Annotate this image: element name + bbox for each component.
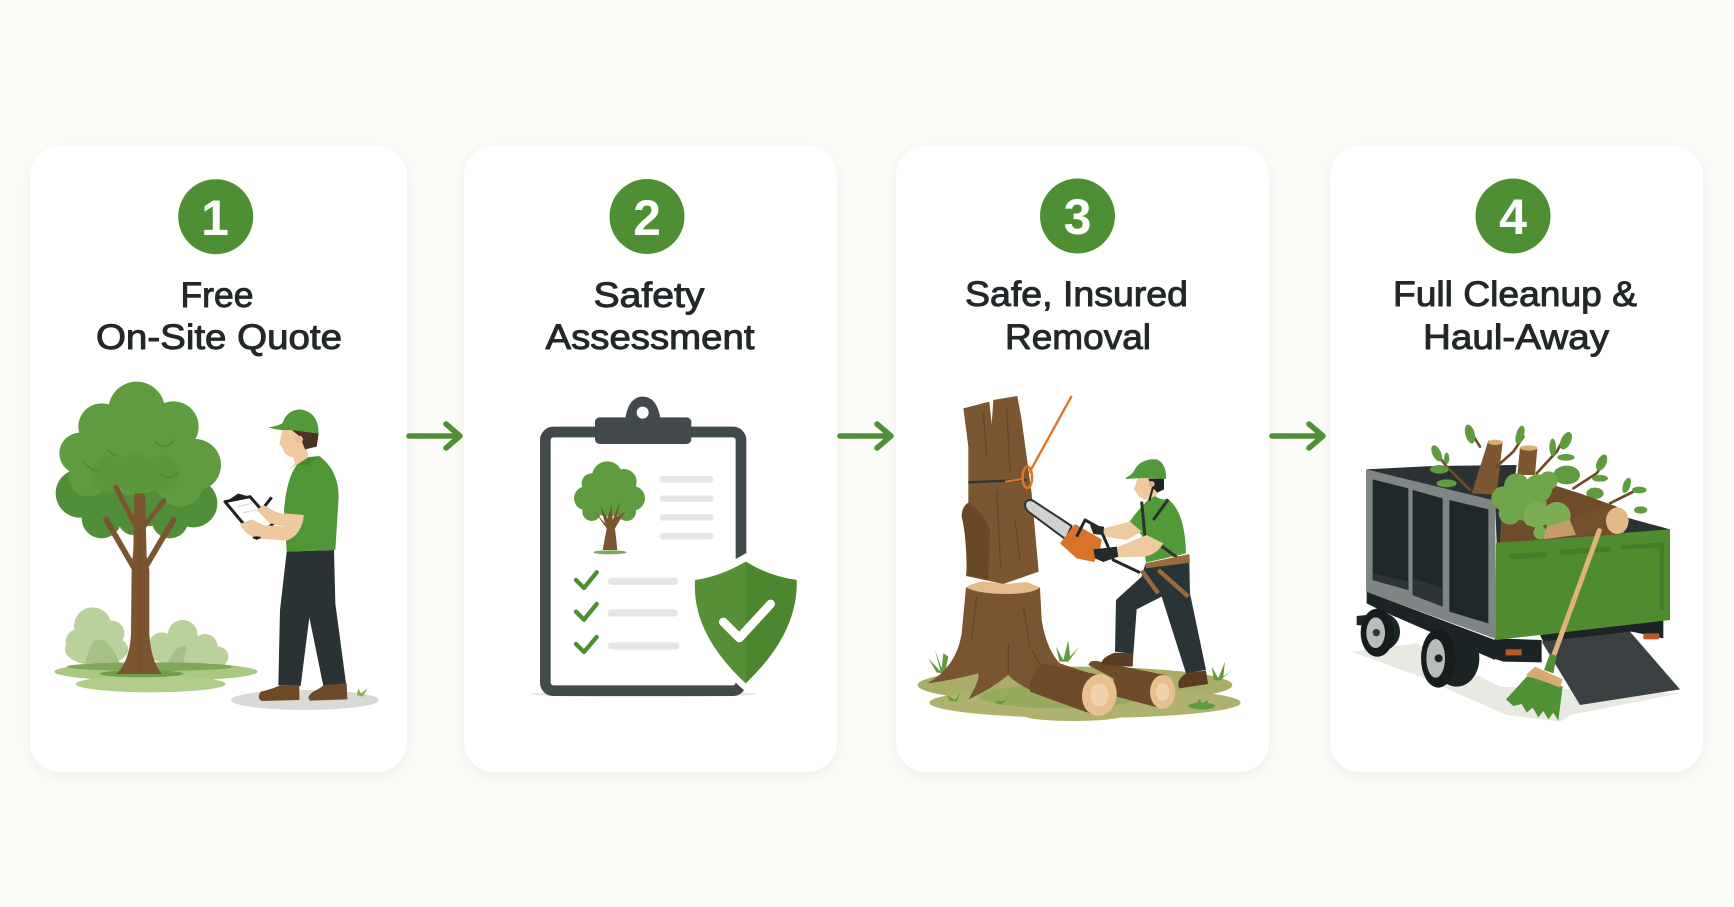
heading: Full Cleanup and Haul-Away [1393, 275, 1637, 357]
step number badge 4 [1476, 178, 1550, 254]
icon: stump and cut trunk [927, 396, 1100, 699]
step number badge 2: 2 [633, 190, 661, 246]
step number badge 2 [610, 179, 684, 254]
heading: Safe, Insured Removal [965, 275, 1188, 357]
illustration: clipboard and shield [531, 397, 804, 697]
step number badge 1 [178, 179, 253, 254]
illustration: tree and estimator with clipboard [54, 382, 379, 710]
arrow: step 1 to 2 [409, 424, 460, 448]
panel: step 2 safety assessment [464, 146, 837, 772]
heading: Safe, Insured Removal: Safe, Insured [965, 275, 1188, 314]
step number badge 3 [1040, 178, 1115, 254]
panel: step 3 safe insured removal [896, 146, 1269, 772]
heading: Safety Assessment: Safety [594, 276, 705, 315]
panel: step 4 full cleanup and haul-away [1330, 146, 1703, 772]
icon: ground and grass [918, 640, 1241, 721]
arrow: step 3 to 4 [1272, 424, 1323, 448]
heading: Free On-Site Quote [96, 276, 342, 357]
icon: cut logs [1030, 661, 1175, 718]
step number badge 4: 4 [1499, 189, 1527, 245]
illustration: debris trailer and broom [1352, 423, 1680, 722]
heading: Safe, Insured Removal: Removal [1005, 318, 1151, 357]
heading: Safety Assessment: Assessment [546, 318, 755, 357]
step number badge 3: 3 [1064, 189, 1091, 245]
icon: arborist [1025, 459, 1208, 688]
icon: debris pile with branches and leaves [1429, 423, 1647, 543]
icon: ground shadow [1352, 643, 1680, 722]
heading: Safety Assessment [546, 276, 755, 357]
icon: trailer [1357, 465, 1670, 688]
step number badge 1: 1 [201, 190, 229, 246]
icon: ramp [1542, 632, 1680, 705]
heading: Free On-Site Quote: On-Site Quote [96, 318, 342, 357]
icon: shield with check [686, 553, 804, 692]
heading: Full Cleanup and Haul-Away: Haul-Away [1423, 318, 1610, 357]
icon: tree with bushes [54, 382, 258, 692]
icon: clipboard [531, 397, 756, 697]
icon: estimator figure [225, 409, 379, 710]
heading: Full Cleanup and Haul-Away: Full Cleanup & [1393, 275, 1637, 314]
icon: broom [1506, 531, 1599, 721]
heading: Free On-Site Quote: Free [180, 276, 254, 315]
arrow: step 2 to 3 [840, 424, 891, 448]
panel: step 1 free on-site quote [30, 146, 407, 772]
illustration: arborist cutting tree with chainsaw [918, 396, 1241, 721]
